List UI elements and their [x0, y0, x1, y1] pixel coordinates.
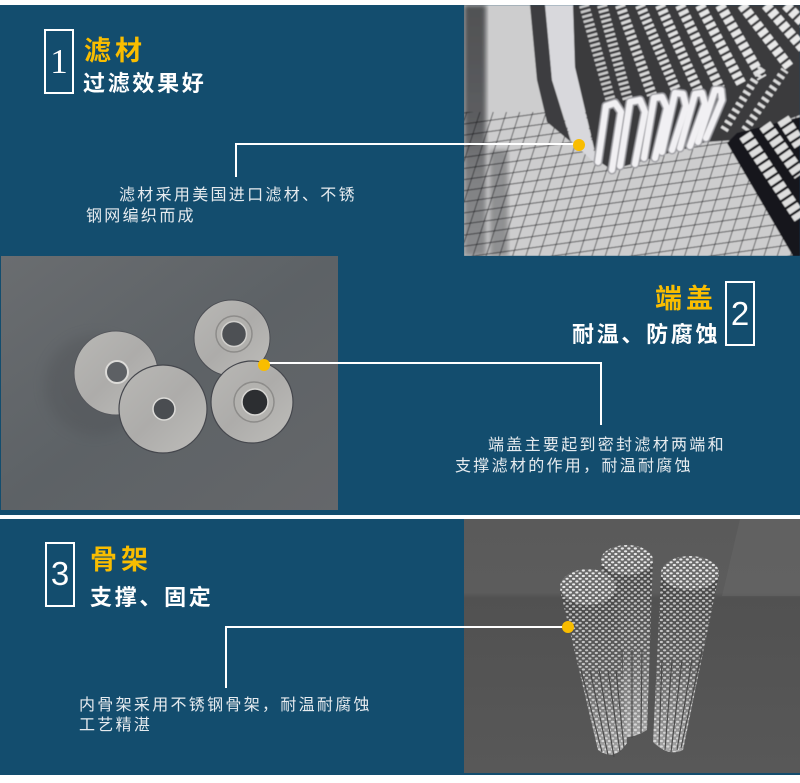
lower right roll: [727, 117, 800, 256]
disc: front centre: [119, 365, 207, 453]
subheading: 过滤效果好: 过滤效果好: [83, 71, 207, 96]
tube: left: [560, 569, 627, 757]
subheading: 耐温、防腐蚀: 耐温、防腐蚀: [572, 322, 720, 347]
number box 1: [45, 30, 73, 93]
section 3: support frame: [46, 543, 574, 734]
body text 2: 支撑滤材的作用，耐温耐腐蚀: [455, 457, 693, 475]
number box 1: 1: [50, 42, 68, 81]
tube: right: [653, 556, 719, 752]
disc: rear left: [74, 331, 158, 415]
body text 3: [79, 696, 372, 734]
callout dot 3: [562, 621, 574, 633]
body text 1: 滤材采用美国进口滤材、不锈: [119, 186, 357, 204]
subheading: 支撑、固定: 支撑、固定: [90, 585, 214, 610]
body text 3: 内骨架采用不锈钢骨架，耐温耐腐蚀: [79, 696, 372, 714]
callout line 3: [226, 627, 568, 688]
callout line 1: [236, 144, 578, 177]
section 2: end cap: [258, 282, 754, 475]
disc: rear right with boss: [194, 300, 270, 376]
light filter band: [545, 5, 597, 165]
callout dot 2: [258, 359, 270, 371]
number box 3: 3: [51, 555, 69, 592]
heading: 滤材: 滤材: [84, 36, 146, 66]
body text 2: 端盖主要起到密封滤材两端和: [488, 436, 726, 454]
pleat fan: [573, 5, 800, 170]
callout line 2: [264, 363, 601, 425]
photo: perforated support tubes: [464, 519, 800, 773]
photo: end caps: [1, 256, 338, 510]
dark mesh strip: [530, 5, 571, 142]
floor mesh: [464, 112, 800, 256]
number box 2: [726, 282, 754, 345]
photo: pleated filter media and mesh: [464, 5, 800, 256]
section 1: filter media: [45, 30, 585, 225]
number box 3: [46, 543, 74, 606]
callout dot 1: [573, 139, 585, 151]
body text 2: [455, 436, 726, 475]
number box 2: 2: [731, 295, 749, 332]
body text 3: 工艺精湛: [79, 716, 152, 734]
tube: middle: [601, 545, 653, 738]
body text 1: 钢网编织而成: [86, 207, 196, 225]
disc: front right with boss: [211, 361, 293, 443]
white pleat folds: [598, 90, 722, 170]
heading: 骨架: 骨架: [90, 545, 152, 575]
heading: 端盖: 端盖: [655, 284, 717, 314]
body text 1: [86, 186, 357, 225]
